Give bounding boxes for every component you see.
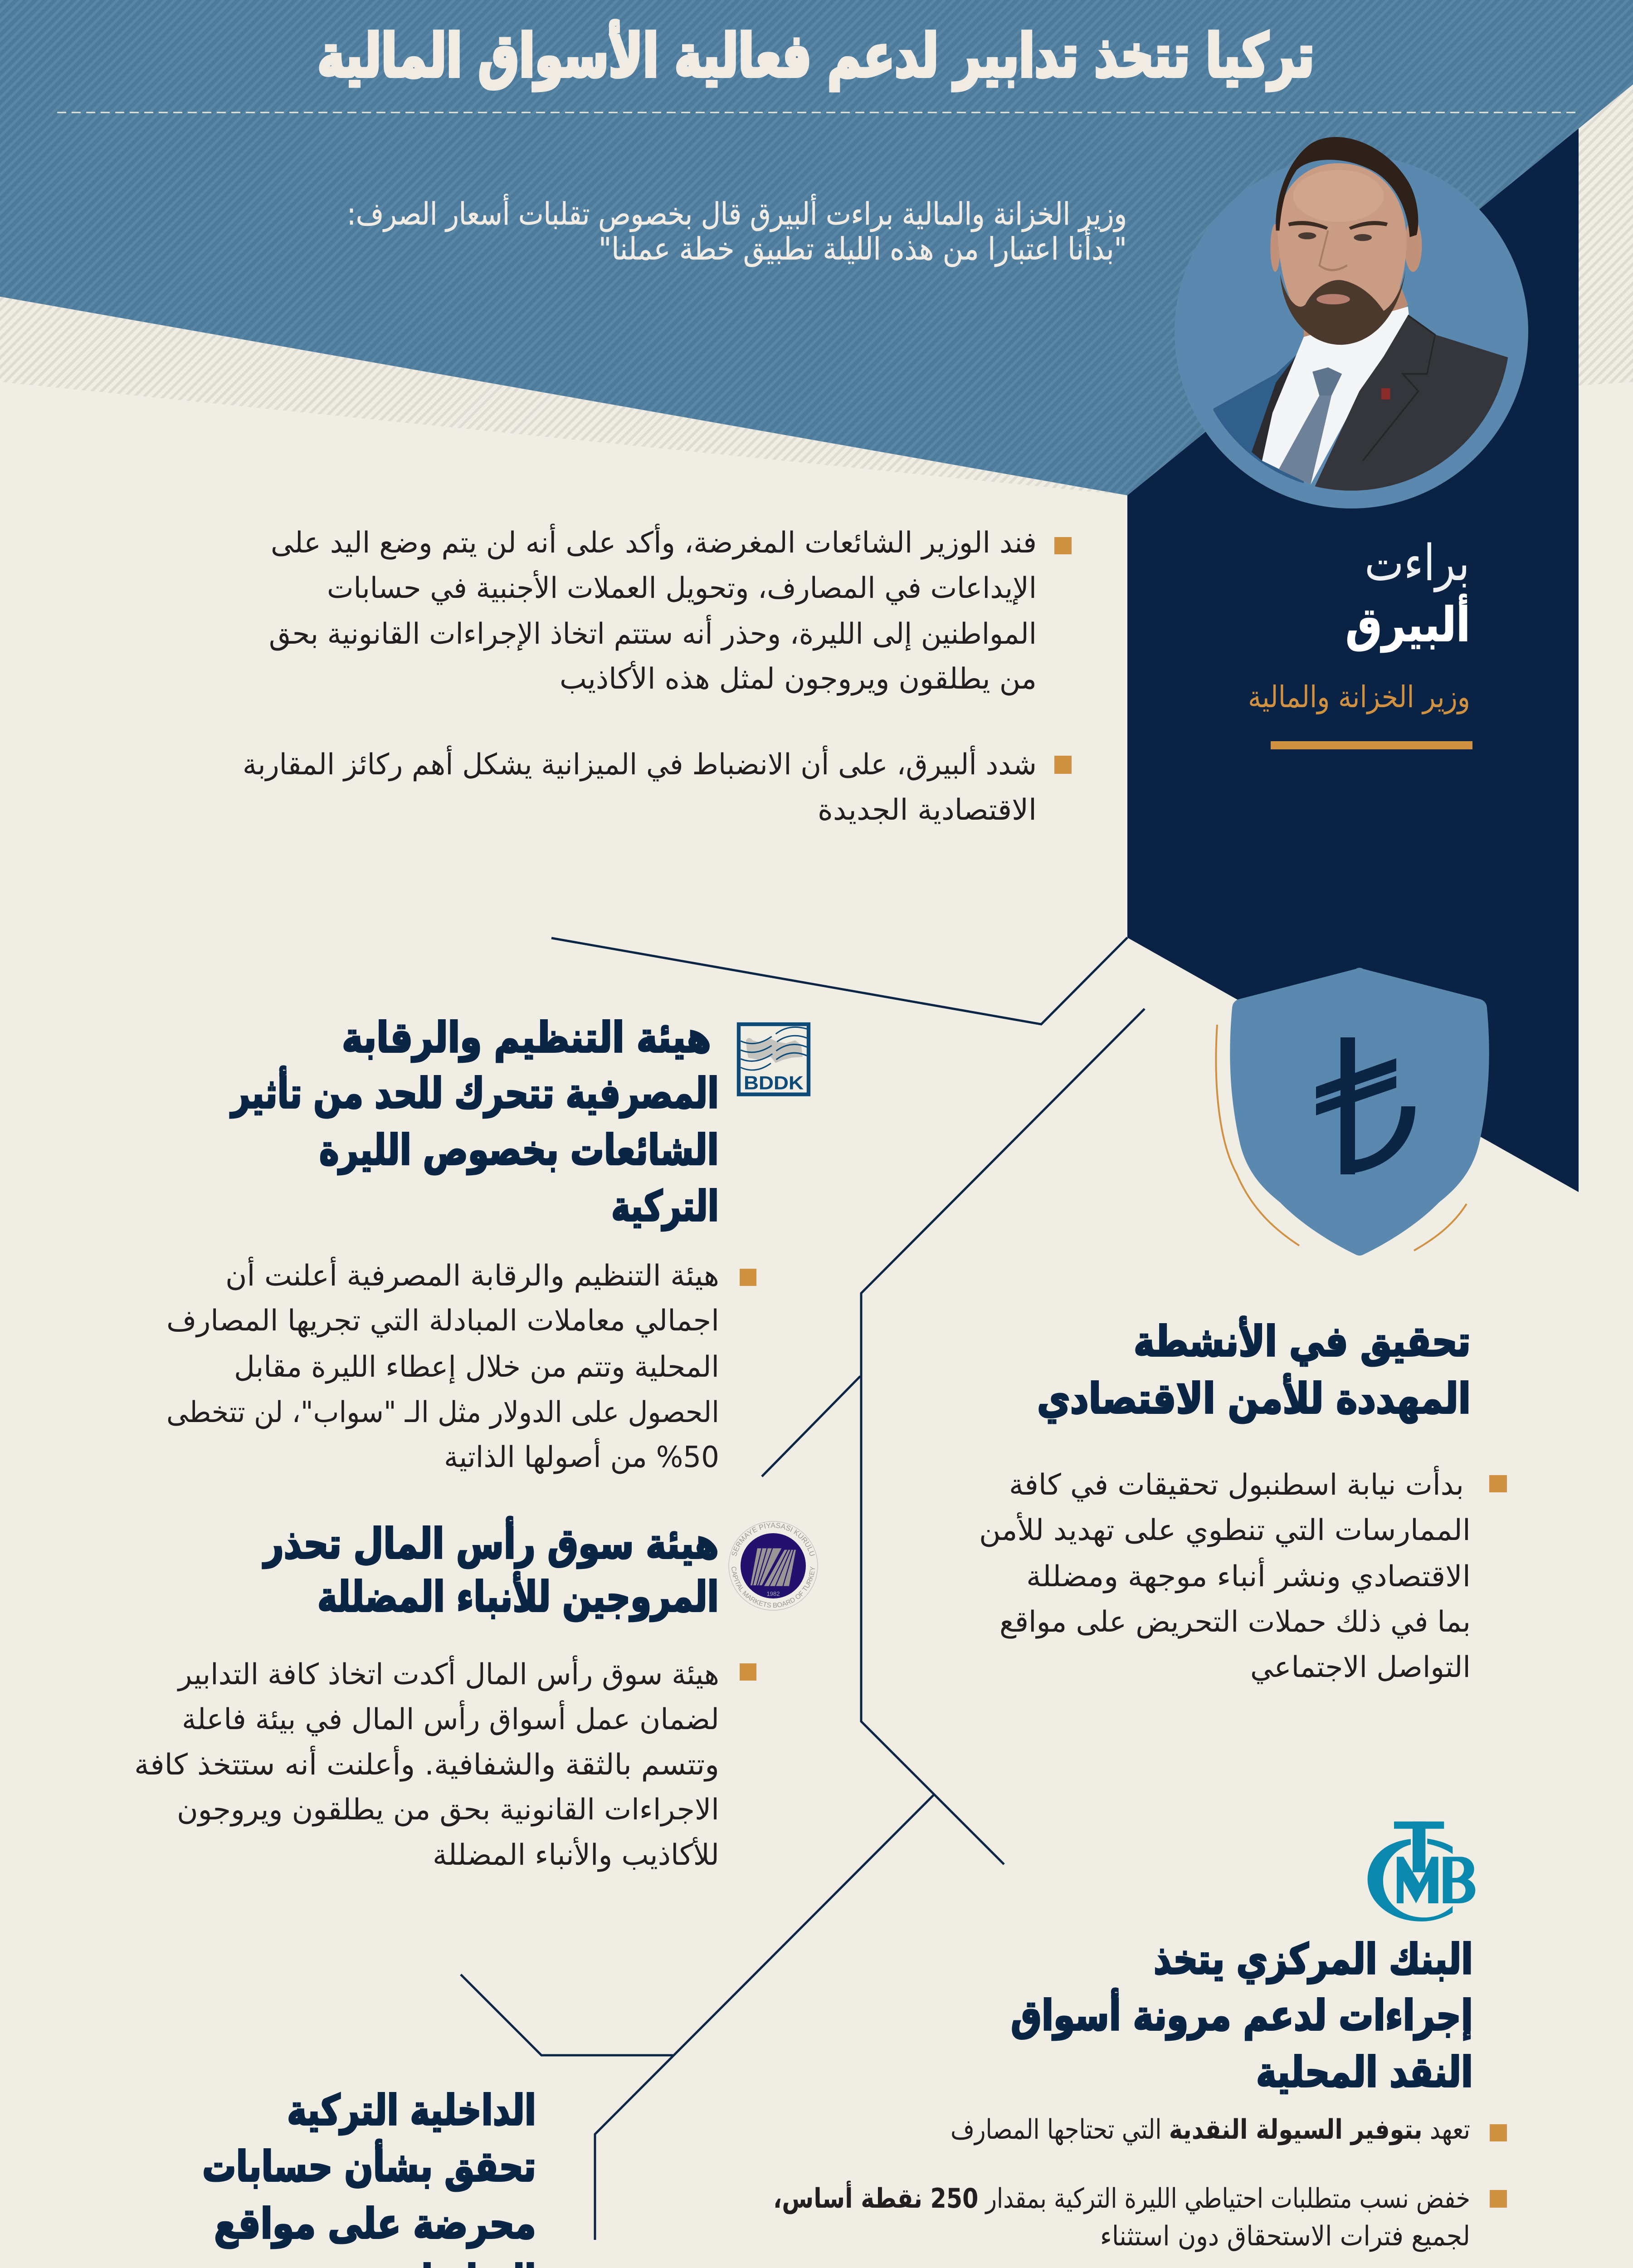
- text block: central bank measures: خفض نسب متطلبات احتياطي الليرة التركية بمقدار 250 نقطة أساس،: [773, 2180, 1470, 2214]
- heading: capital markets board: هيئة سوق رأس المال تحذر: [263, 1516, 719, 1569]
- striped background bands: [0, 84, 1633, 495]
- minister name and role: ألبيرق: [1345, 594, 1470, 652]
- text block: economic security investigation: الممارسات التي تنطوي على تهديد للأمن: [979, 1512, 1471, 1547]
- text block: economic security investigation: [979, 1466, 1507, 1684]
- text block: economic security investigation: التواصل الاجتماعي: [1250, 1651, 1471, 1684]
- icon: capital markets board logo: SERMAYE PİYASASI KURULU: [731, 1522, 816, 1557]
- heading: BDDK: هيئة التنظيم والرقابة: [342, 1013, 711, 1062]
- text block: central bank measures: تعهد بتوفير السيولة النقدية التي تحتاجها المصارف: [951, 2114, 1470, 2146]
- text block: BDDK: [166, 1256, 756, 1474]
- title: تركيا تتخذ تدابير لدعم فعالية الأسواق المالية: [317, 20, 1314, 91]
- heading: economic security investigation: [1037, 1316, 1471, 1423]
- heading: interior ministry: الداخلية التركية: [287, 2086, 536, 2135]
- icon: BDDK logo: BDDK: [744, 1072, 804, 1094]
- text block: BDDK: هيئة التنظيم والرقابة المصرفية أعلنت أن: [225, 1256, 719, 1293]
- text block: BDDK: المحلية وتتم من خلال إعطاء الليرة مقابل: [234, 1350, 719, 1384]
- minister name and role: [1248, 534, 1472, 749]
- icon: capital markets board logo: 1982: [767, 1590, 780, 1597]
- heading: interior ministry: تحقق بشأن حسابات: [202, 2139, 536, 2191]
- text block: minister statements: من يطلقون ويروجون لمثل هذه الأكاذيب: [560, 660, 1037, 696]
- text block: capital markets board: [134, 1655, 756, 1872]
- text block: BDDK: ‭%50‬ من أصولها الذاتية: [444, 1438, 719, 1474]
- text block: BDDK: الحصول على الدولار مثل الـ "سواب"، لن تتخطى: [166, 1396, 719, 1429]
- heading: economic security investigation: المهددة للأمن الاقتصادي: [1037, 1374, 1471, 1423]
- heading: BDDK: المصرفية تتحرك للحد من تأثير: [230, 1066, 719, 1118]
- text block: minister statements: المواطنين إلى الليرة، وحذر أنه ستتم اتخاذ الإجراءات القانونية بحق: [269, 615, 1037, 651]
- icon: capital markets board logo: CAPITAL MARKETS BOARD OF TURKEY: [730, 1566, 817, 1609]
- heading: capital markets board: [263, 1516, 719, 1622]
- heading: interior ministry: [202, 2086, 536, 2268]
- icon: capital markets board logo: [729, 1521, 818, 1610]
- heading: central bank: النقد المحلية: [1256, 2048, 1473, 2097]
- text block: capital markets board: لضمان عمل أسواق رأس المال في بيئة فاعلة: [182, 1700, 719, 1736]
- heading: BDDK: الشائعات بخصوص الليرة: [319, 1126, 719, 1175]
- minister name and role: براءت: [1365, 534, 1470, 592]
- text block: capital markets board: هيئة سوق رأس المال أكدت اتخاذ كافة التدابير: [177, 1655, 719, 1691]
- icon: shield with lira sign: [1216, 968, 1489, 1256]
- text block: minister statements: الاقتصادية الجديدة: [818, 793, 1037, 827]
- connector lines: [461, 938, 1145, 2240]
- portrait: minister: [1213, 137, 1508, 491]
- text block: capital markets board: وتتسم بالثقة والشفافية. وأعلنت أنه ستتخذ كافة: [134, 1745, 719, 1782]
- text block: minister statements: الإيداعات في المصارف، وتحويل العملات الأجنبية في حسابات: [327, 570, 1037, 605]
- heading: BDDK: التركية: [611, 1182, 719, 1231]
- text block: capital markets board: للأكاذيب والأنباء المضللة: [433, 1837, 719, 1872]
- quote text: وزير الخزانة والمالية براءت ألبيرق قال بخصوص تقلبات أسعار الصرف:: [347, 194, 1127, 232]
- icon: central bank logo: [1368, 1822, 1475, 1921]
- minister name and role: وزير الخزانة والمالية: [1248, 679, 1470, 714]
- text block: minister statements: فند الوزير الشائعات المغرضة، وأكد على أنه لن يتم وضع اليد على: [271, 523, 1037, 560]
- heading: economic security investigation: تحقيق في الأنشطة: [1134, 1316, 1471, 1366]
- quote text: "بدأنا اعتبارا من هذه الليلة تطبيق خطة عملنا": [599, 229, 1127, 267]
- portrait circle: [1175, 155, 1528, 508]
- heading: capital markets board: المروجين للأنباء المضللة: [317, 1572, 719, 1622]
- text block: minister statements: شدد ألبيرق، على أن الانضباط في الميزانية يشكل أهم ركائز المقاربة: [243, 745, 1037, 782]
- heading: central bank: البنك المركزي يتخذ: [1154, 1935, 1473, 1984]
- heading: interior ministry: محرضة على مواقع: [214, 2200, 536, 2248]
- text block: central bank measures: [760, 2114, 1507, 2268]
- panel: blue header band: [0, 0, 1633, 495]
- text block: economic security investigation: الاقتصادي ونشر أنباء موجهة ومضللة: [1026, 1557, 1471, 1593]
- icon: BDDK logo: [739, 1024, 809, 1095]
- text block: central bank measures: لجميع فترات الاستحقاق دون استثناء: [1100, 2220, 1470, 2252]
- text block: minister statements: [243, 523, 1072, 827]
- heading: central bank: إجراءات لدعم مرونة أسواق: [1011, 1988, 1473, 2040]
- text block: capital markets board: الاجراءات القانونية بحق من يطلقون ويروجون: [177, 1793, 719, 1827]
- text block: economic security investigation: بما في ذلك حملات التحريض على مواقع: [999, 1605, 1471, 1639]
- heading: central bank: [1011, 1935, 1473, 2097]
- heading: BDDK: [230, 1013, 719, 1231]
- text block: BDDK: اجمالي معاملات المبادلة التي تجريها المصارف: [166, 1304, 719, 1338]
- panel: navy minister panel: [1127, 128, 1579, 1192]
- quote text: [347, 194, 1127, 267]
- text block: economic security investigation: بدأت نيابة اسطنبول تحقيقات في كافة: [1009, 1466, 1464, 1502]
